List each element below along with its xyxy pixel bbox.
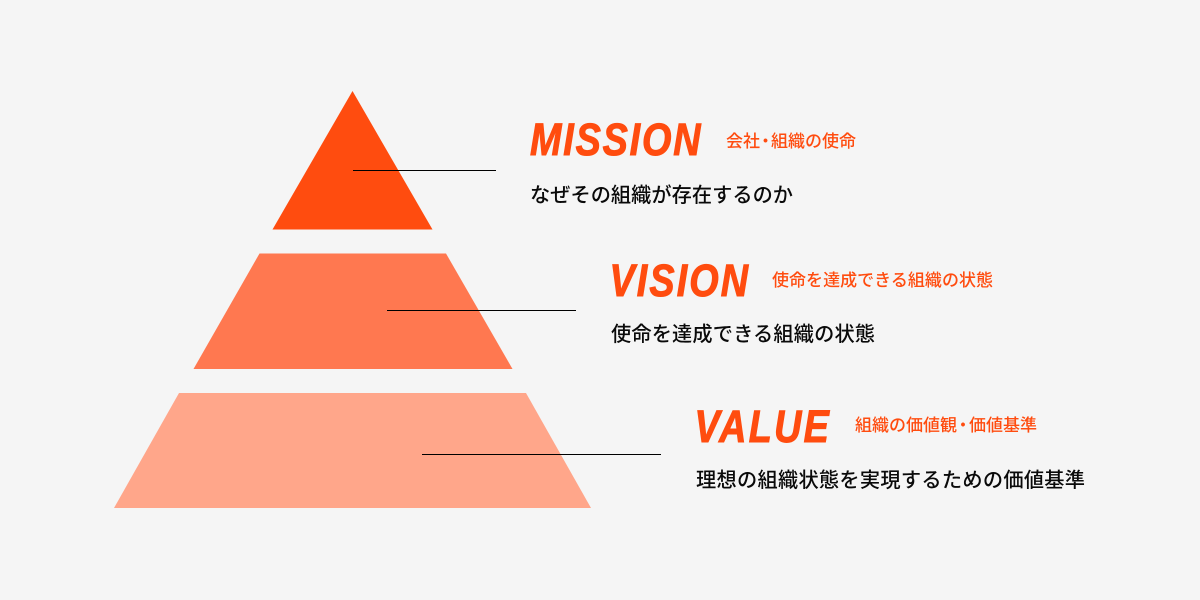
subheading: value: 組織の価値観・価値基準: [855, 416, 1037, 435]
leader line: value: [422, 454, 661, 455]
text block: mission: [530, 114, 856, 207]
heading: mission: MISSION: [530, 114, 701, 165]
subheading: mission: 会社・組織の使命: [726, 132, 856, 151]
leader line: mission: [353, 170, 496, 171]
heading: vision: VISION: [610, 255, 749, 306]
description: mission: なぜその組織が存在するのか: [530, 184, 793, 207]
text block: value: [694, 401, 1085, 492]
subheading: vision: 使命を達成できる組織の状態: [772, 271, 993, 290]
heading: value: VALUE: [694, 401, 830, 452]
pyramid tier: vision: [194, 254, 512, 369]
leader line: vision: [387, 310, 576, 311]
text block: vision: [610, 255, 993, 346]
description: value: 理想の組織状態を実現するための価値基準: [696, 469, 1085, 492]
pyramid tier: value: [114, 393, 591, 508]
description: vision: 使命を達成できる組織の状態: [611, 323, 875, 346]
pyramid tier: mission: [272, 91, 432, 230]
